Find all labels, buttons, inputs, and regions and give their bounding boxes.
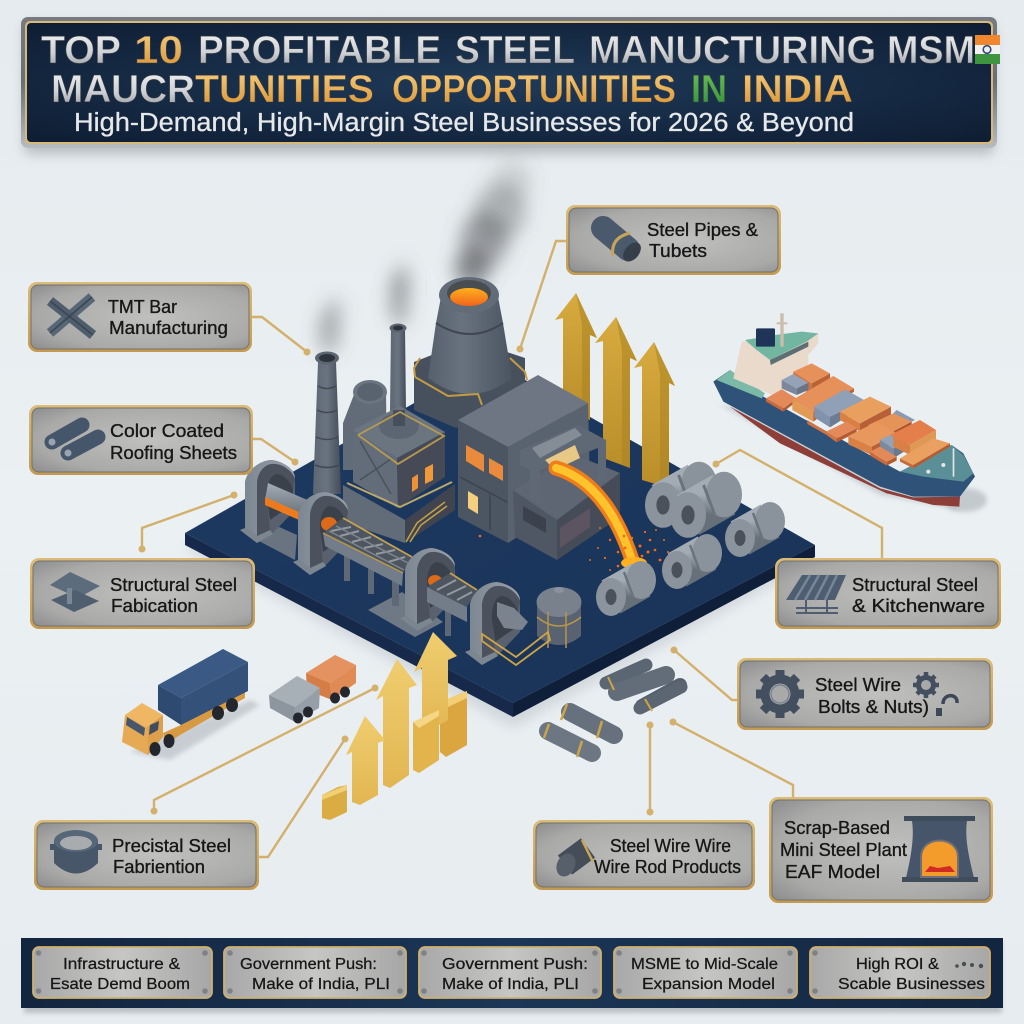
- walkway rail: [482, 632, 550, 665]
- label text: Wire Rod Products: [594, 857, 741, 877]
- arrow 2: [595, 317, 637, 468]
- connector: roofing sheets: [253, 439, 298, 466]
- arrow B: [376, 659, 417, 788]
- hull blue: [713, 370, 975, 497]
- icon: small gear: [913, 672, 939, 698]
- arrow 3: [634, 342, 675, 488]
- label text: Structural Steel: [110, 575, 237, 595]
- label text: Mini Steel Plant: [780, 840, 907, 860]
- plaque: government push 2: Government Push:: [442, 956, 588, 973]
- connector: steel pipes: [516, 241, 566, 352]
- chimney back: [390, 324, 406, 412]
- bundle 2: [544, 704, 614, 757]
- main building right block: [458, 375, 590, 543]
- container stack j: [868, 413, 912, 442]
- main building left block: [343, 406, 455, 543]
- rolling mill line: [240, 460, 550, 665]
- label text: [594, 836, 741, 877]
- plaque: infrastructure: Infrastructure &: [63, 956, 181, 973]
- coil 2: [662, 534, 722, 589]
- sparks: [479, 527, 669, 573]
- label text: Steel Pipes &: [647, 220, 758, 240]
- title line 2: IN: [691, 68, 727, 111]
- molten steel stream: [479, 468, 669, 573]
- icon: steel ring pot: [50, 830, 102, 874]
- plaque: high ROI: Scable Businesses: [838, 976, 985, 993]
- plaque: infrastructure: Esate Demd Boom: [50, 976, 190, 993]
- label text: Color Coated: [110, 421, 224, 441]
- panel: steel wire rod products: [533, 820, 755, 890]
- panel: structural steel and kitchenware: [775, 558, 1001, 629]
- conveyor section 1: [323, 518, 412, 606]
- connector: wire rod: [646, 722, 654, 816]
- side silo: [343, 380, 387, 470]
- furnace glow 2: [428, 575, 442, 587]
- furnace glow 1: [321, 517, 337, 531]
- container stack k2: [870, 447, 897, 466]
- label text: Structural Steel: [852, 575, 978, 595]
- arrow 1: [555, 293, 597, 420]
- label text: [852, 575, 985, 616]
- label text: Tubets: [649, 241, 707, 261]
- plaque: government push 1: Make of India, PLI: [252, 976, 390, 993]
- connector: precision fabrication: [150, 684, 378, 814]
- flag of India: [975, 35, 1000, 64]
- label text: & Kitchenware: [852, 596, 985, 616]
- storage tank: [536, 587, 582, 648]
- roller arch 2: [293, 492, 348, 575]
- title banner: [21, 17, 1000, 154]
- label text: EAF Model: [785, 862, 880, 882]
- roller arch 4: [465, 582, 520, 665]
- roller arch 3: [400, 548, 455, 631]
- container stack h: [848, 422, 897, 455]
- plaque: infrastructure: [33, 947, 212, 998]
- coil 5: [670, 472, 742, 538]
- chimney left: [313, 352, 341, 494]
- icon: furnace: [902, 816, 978, 882]
- coil 3: [725, 502, 785, 557]
- plaque: MSME expansion: Expansion Model: [642, 976, 775, 993]
- connector: precision fabrication 2: [259, 736, 348, 857]
- container stack l: [900, 438, 950, 468]
- plaque: government push 2: [419, 947, 601, 998]
- plaque: government push 1: [224, 947, 406, 998]
- rebar bundles: [544, 665, 681, 757]
- orange crate: [306, 655, 356, 700]
- icon: hook: [939, 696, 957, 716]
- panel: color coated roofing sheets: [29, 405, 253, 475]
- connector: bolts: [670, 646, 737, 700]
- plaque: government push 1: Government Push:: [240, 956, 377, 973]
- block small: [322, 785, 347, 820]
- label text: Manufacturing: [109, 318, 228, 338]
- hot cylinder: [265, 483, 312, 520]
- title line 1: [41, 29, 975, 72]
- ship scaled group: [713, 313, 975, 507]
- title line 2: [51, 68, 853, 111]
- connector lines: [138, 241, 882, 857]
- grey crate: [269, 676, 320, 722]
- stern deck: [717, 370, 765, 398]
- smudge marks: [955, 962, 983, 968]
- container ship: [713, 313, 987, 512]
- roller arch 1: [240, 460, 295, 543]
- title line 1: TOP: [41, 29, 121, 72]
- icon: rolled sheets: [48, 425, 98, 456]
- plaque: high ROI: High ROI &: [856, 956, 940, 973]
- lower mill block and frame: [513, 425, 620, 560]
- label text: [110, 421, 237, 463]
- lower gold arrows: [322, 632, 467, 820]
- block D: [413, 710, 439, 773]
- icon: steel plates: [50, 572, 100, 612]
- truck: [122, 649, 260, 760]
- title line 1: STEEL: [455, 29, 575, 72]
- container: [158, 649, 248, 725]
- container stack j2: [890, 420, 936, 455]
- icon: pipe: [603, 228, 644, 265]
- gold growth arrows behind factory: [555, 293, 675, 488]
- motor shaft: [497, 602, 528, 630]
- title line 1: PROFITABLE: [198, 29, 441, 72]
- cargo trailer: [269, 655, 356, 724]
- arrow C: [414, 632, 457, 735]
- steel coils on platform: [645, 462, 785, 589]
- connector: kitchenware: [712, 450, 882, 558]
- container stack g: [807, 420, 857, 442]
- plaque: MSME expansion: MSME to Mid-Scale: [631, 956, 778, 973]
- container stack k: [880, 433, 907, 458]
- label text: [108, 297, 228, 338]
- trailer deck: [163, 692, 245, 745]
- container stack e: [814, 389, 864, 427]
- icon: large gear: [756, 670, 804, 718]
- title line 1: MANUCTURING: [589, 29, 876, 72]
- panel: structural steel fabrication: [30, 558, 255, 629]
- block E: [440, 691, 467, 757]
- label text: Scrap-Based: [784, 818, 890, 838]
- container stack b: [782, 374, 808, 395]
- coil 4: [645, 462, 717, 528]
- plaque: MSME expansion: [614, 947, 797, 998]
- blast furnace tower: [414, 277, 527, 428]
- title line 2: TUNITIES: [195, 68, 374, 111]
- panel: steel wire bolts and nuts: [737, 658, 993, 730]
- foredeck details: [926, 448, 954, 477]
- factory platform: [185, 360, 815, 728]
- cab: [122, 703, 163, 755]
- connector: TMT bar: [252, 317, 310, 356]
- label text: [112, 836, 231, 877]
- label text: Fabriention: [113, 857, 205, 877]
- label text: Bolts & Nuts): [818, 697, 929, 717]
- wheels: [150, 698, 238, 756]
- container stack f: [840, 397, 891, 432]
- icon: corrugated sheet: [786, 575, 846, 613]
- label text: Precistal Steel: [112, 836, 231, 856]
- title line 2: MAUCR: [51, 68, 195, 111]
- label text: [780, 818, 907, 882]
- panel: TMT bar manufacturing: [28, 282, 252, 352]
- connector: scrap plant: [670, 718, 793, 797]
- container stack i: [890, 410, 915, 423]
- title line 2: OPPORTUNITIES: [392, 68, 676, 111]
- base slab: [368, 592, 443, 637]
- panel: scrap-based mini steel plant: [769, 797, 993, 903]
- plaque: government push 2: Make of India, PLI: [442, 976, 579, 993]
- icon: crossed bars: [50, 297, 93, 335]
- bundle 1: [606, 665, 681, 711]
- smoke plumes: [318, 160, 532, 354]
- label text: TMT Bar: [108, 297, 177, 317]
- label text: Steel Wire: [815, 675, 901, 695]
- container stack d: [792, 376, 854, 422]
- panel: steel pipes and tubets: [566, 205, 781, 275]
- title line 1: MSM: [887, 29, 975, 72]
- container stack c: [766, 389, 797, 412]
- connector: structural fabrication: [138, 492, 238, 552]
- subtitle: High-Demand, High-Margin Steel Businesses for 2026 & Beyond: [74, 109, 854, 137]
- plaque: high ROI: [810, 947, 990, 998]
- bow deck: [900, 445, 973, 482]
- label text: [815, 675, 929, 717]
- label text: [647, 220, 758, 261]
- front steel coil: [596, 561, 656, 616]
- bottom highlight strip: [21, 938, 1003, 1013]
- container stack a: [793, 363, 830, 395]
- conveyor section 2: [427, 573, 477, 636]
- cargo containers: [766, 363, 950, 468]
- machine box: [257, 517, 297, 560]
- label text: Fabication: [111, 596, 198, 616]
- icon: wire spool: [553, 840, 593, 880]
- label text: [110, 575, 237, 616]
- wheels: [293, 686, 350, 724]
- panel: precision steel fabrication: [34, 820, 259, 890]
- bridge superstructure: [733, 313, 818, 397]
- hull red: [730, 407, 960, 507]
- arrow A: [346, 716, 385, 805]
- label text: Roofing Sheets: [110, 443, 237, 463]
- title line 2: INDIA: [742, 68, 853, 111]
- title line 1: 10: [134, 29, 183, 72]
- label text: Steel Wire Wire: [610, 836, 731, 856]
